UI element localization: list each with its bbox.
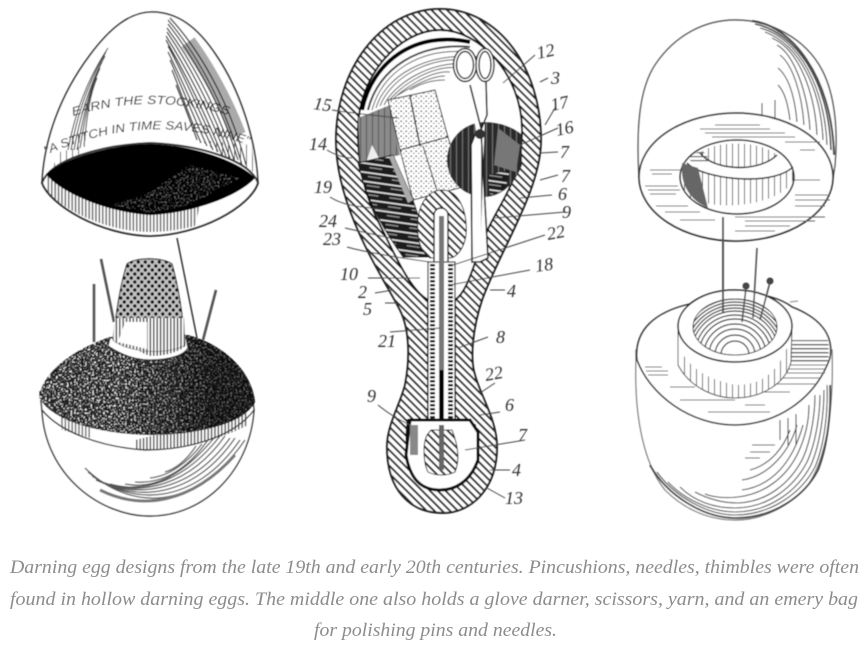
- caption: [9, 558, 859, 641]
- egg 1 upper shell: [42, 12, 258, 183]
- egg 2 part numbers: 3: [550, 68, 560, 88]
- caption: Darning egg designs from the late 19th and early 20th centuries. Pincushions, needles, thimbles were often: [9, 558, 859, 578]
- egg 2 part numbers: 24: [319, 211, 337, 231]
- egg 1 upright needles: [94, 259, 216, 342]
- egg 1 inscription: [44, 95, 252, 154]
- egg 2 scissors: [455, 50, 492, 262]
- egg 2 emery bag: [447, 122, 522, 197]
- egg 2 gray yarn: [358, 105, 400, 165]
- egg 2: cross-section with sewing kit: [309, 9, 575, 513]
- egg 2 part numbers: 7: [561, 166, 571, 186]
- egg 2 part numbers: 10: [340, 264, 358, 284]
- egg 2 part numbers: 7: [518, 425, 528, 445]
- egg 1: thimble and pincushion egg: [38, 10, 260, 518]
- egg 2 dark yarn: [358, 155, 432, 257]
- egg 2 dotted yarn cards: [388, 90, 463, 200]
- egg 2 glove darner head: [418, 190, 466, 258]
- egg 2 part numbers: 6: [505, 395, 514, 415]
- egg 1 inscription: "A STITCH IN TIME SAVES NINE": [44, 120, 252, 154]
- egg 2 part numbers: 17: [549, 91, 571, 115]
- egg 2 hollow cavity: [358, 30, 522, 490]
- egg 3 upper ring opening: [680, 140, 794, 214]
- egg 2 part numbers: 15: [312, 93, 333, 115]
- egg 2 leader lines: [327, 55, 565, 498]
- egg 2 part numbers: 22: [545, 221, 566, 244]
- egg 2 part numbers: 14: [309, 134, 327, 154]
- egg 2 part numbers: 21: [378, 331, 396, 351]
- egg 2 part numbers: 2: [358, 282, 367, 302]
- egg 3 raised cylinder: [678, 290, 792, 398]
- egg 3: two-part egg with pincushion well: [636, 20, 836, 520]
- egg 2 part numbers: 16: [554, 117, 575, 140]
- caption: for polishing pins and needles.: [314, 621, 557, 641]
- egg 2 part numbers: [309, 40, 575, 508]
- egg 2 part numbers: 12: [535, 40, 556, 63]
- egg 1 lower hemisphere: [40, 392, 254, 516]
- egg 2 part numbers: 9: [367, 386, 376, 406]
- egg 2 part numbers: 6: [558, 184, 567, 204]
- egg 3 lower body: [636, 350, 832, 520]
- egg 2 hatched wall: [336, 9, 541, 513]
- caption: found in hollow darning eggs. The middle one also holds a glove darner, scissors, yarn, and an emery bag: [10, 590, 858, 610]
- egg 1 thimble: [108, 259, 188, 360]
- egg 3 upper dome: [638, 20, 836, 178]
- egg 2 lower socket: [406, 420, 478, 490]
- egg 2 part numbers: 23: [323, 229, 341, 249]
- egg 2 cavity shading: [362, 39, 480, 110]
- egg 1 dark shell interior: [46, 144, 255, 215]
- egg 2 part numbers: 4: [512, 460, 521, 480]
- egg 2 part numbers: 9: [562, 202, 571, 222]
- egg 1 pincushion: [39, 335, 255, 435]
- egg 2 part numbers: 18: [534, 254, 554, 276]
- egg 2 part numbers: 5: [363, 299, 372, 319]
- egg 2 central tube: [428, 208, 455, 461]
- egg 1 inscription: EARN THE STOCKINGS: [72, 95, 231, 116]
- egg 2 part numbers: 22: [483, 362, 504, 385]
- egg 3 pincushion well: [692, 298, 778, 356]
- egg 2 part numbers: 8: [496, 327, 505, 347]
- egg 3 needles and pins: [723, 217, 798, 322]
- egg 2 part numbers: 19: [314, 177, 332, 197]
- egg 3 upper ring face: [639, 113, 833, 241]
- egg 2 part numbers: 4: [507, 281, 516, 301]
- egg 1 shell rim: [42, 143, 258, 236]
- egg 2 part numbers: 7: [560, 142, 570, 162]
- egg 3 lower plate: [637, 293, 831, 425]
- egg 1 long needle: [177, 238, 197, 338]
- egg 2 part numbers: 13: [505, 488, 523, 508]
